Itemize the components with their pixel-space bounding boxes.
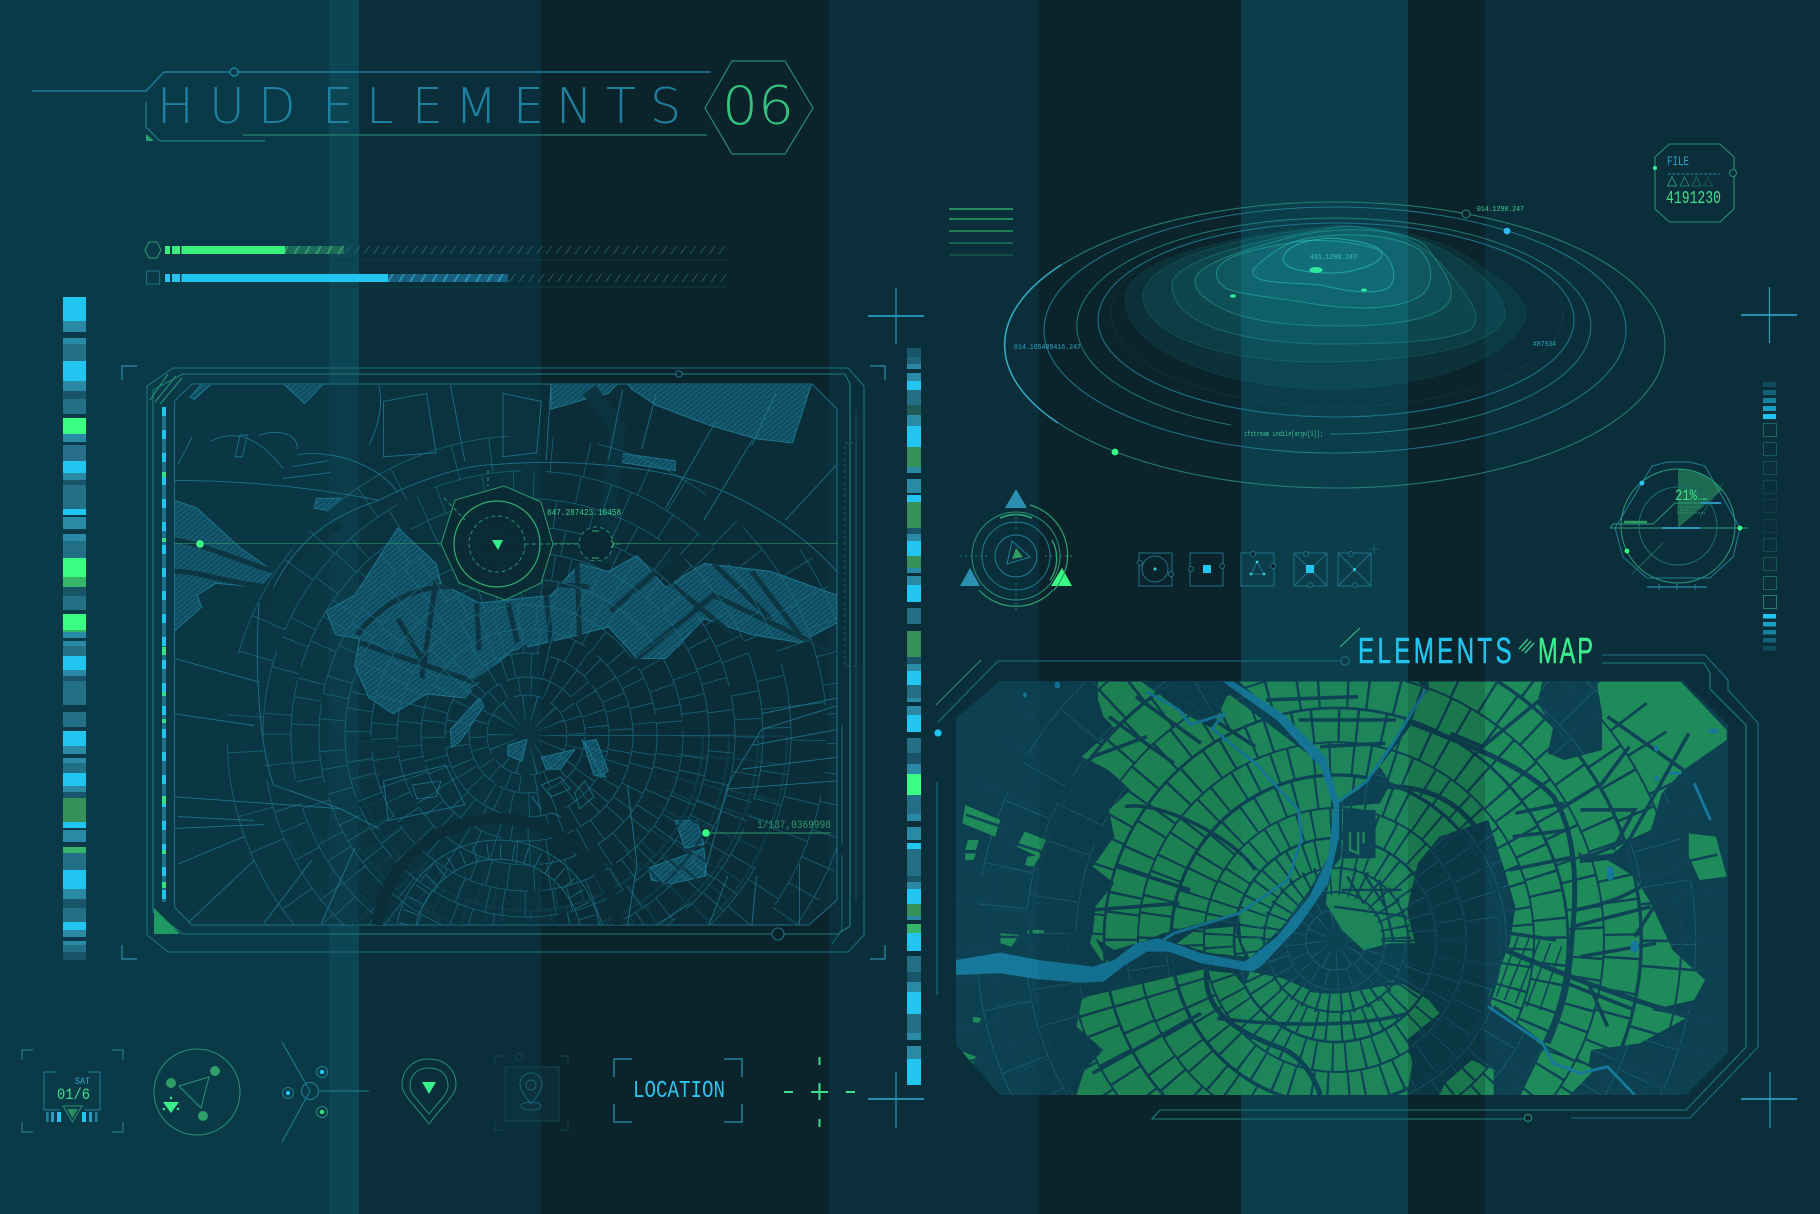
compass widget <box>960 489 1072 610</box>
dim pin box <box>495 1053 568 1130</box>
icon: cross with dot <box>1338 544 1379 588</box>
date widget: SAT <box>75 1077 90 1088</box>
crosshair line <box>174 542 838 544</box>
dark arterial streets <box>174 390 837 694</box>
stacked lines <box>949 209 1013 255</box>
icon: square target <box>1188 553 1224 586</box>
chart labels: 014.1298.247 <box>1477 206 1524 214</box>
date widget: 01/6 <box>57 1086 90 1104</box>
main roads <box>1093 690 1689 1095</box>
chart labels: #87934 <box>1533 341 1556 349</box>
dark block streets <box>347 735 788 925</box>
title: HUD ELEMENTS: HUD ELEMENTS <box>157 78 681 135</box>
crosshair markers <box>868 287 1797 1128</box>
badge: 06 hexagon: 06 <box>722 76 794 137</box>
progress bar: blue <box>146 271 726 287</box>
icon: cross with square <box>1294 552 1327 588</box>
chart labels: 014.165409416.247 <box>1014 344 1081 352</box>
faint streets on dark ground <box>976 680 1696 1100</box>
fortified block <box>1343 810 1376 858</box>
heading: ELEMENTS MAP: MAP <box>1538 630 1595 671</box>
extra map street lines <box>174 386 837 925</box>
radar gauge <box>1610 462 1748 590</box>
hatched districts <box>174 384 837 884</box>
five target icons <box>1138 544 1379 588</box>
chart labels: 431.1298.247 <box>1310 254 1357 262</box>
chart points <box>1112 210 1510 455</box>
file box <box>1653 144 1736 222</box>
icon: circle target <box>1138 553 1174 586</box>
marker dot with label: 1/137,0369998 <box>757 820 831 832</box>
radar gauge: Load <box>1698 497 1708 502</box>
date widget <box>22 1050 123 1132</box>
progress bar: green <box>145 242 726 260</box>
panel frame <box>122 366 885 959</box>
corner triangle <box>154 908 180 934</box>
branch node icon <box>282 1042 369 1142</box>
contour blobs <box>1125 226 1526 389</box>
map background <box>174 384 837 925</box>
band shading on map <box>1039 681 1485 1095</box>
right level column <box>1763 382 1776 650</box>
marker dot west <box>196 540 204 548</box>
target reticle <box>441 470 620 600</box>
panel: green city map <box>934 655 1758 1122</box>
location label <box>614 1059 742 1122</box>
icon: triangle nodes <box>1241 552 1276 586</box>
green crosshair <box>784 1057 855 1127</box>
map pin icon <box>402 1059 456 1124</box>
network circle icon <box>154 1049 240 1135</box>
title frame <box>32 68 711 141</box>
concentric streets <box>227 436 857 927</box>
location label: LOCATION <box>633 1078 725 1105</box>
dark street grid <box>968 681 1704 1100</box>
green districts <box>963 682 1727 1095</box>
map streets <box>174 384 837 925</box>
radar gauge: 21% <box>1675 487 1697 505</box>
file box: 4191230 <box>1666 189 1721 209</box>
orbit rings <box>1005 202 1665 488</box>
panel: blue city map <box>122 366 885 995</box>
middle stripe meter <box>907 348 921 1085</box>
file box: FILE <box>1667 154 1689 169</box>
coordinate label: 847.287423.10458 <box>547 508 621 518</box>
orbital topographic chart <box>1005 202 1665 488</box>
marker dot with label <box>702 820 831 837</box>
chart labels <box>1014 206 1556 439</box>
map background <box>956 681 1728 1095</box>
badge: 06 hexagon <box>705 61 813 154</box>
left mini stripe <box>162 407 166 902</box>
left stripe meter <box>63 297 86 960</box>
heading: ELEMENTS MAP: ELEMENTS <box>1358 630 1515 671</box>
chart labels: ifstream indile[argv[1]]; <box>1244 431 1323 439</box>
bottom river arc <box>377 819 619 925</box>
panel frame <box>934 655 1758 1122</box>
rivers and canals <box>956 682 1719 1095</box>
